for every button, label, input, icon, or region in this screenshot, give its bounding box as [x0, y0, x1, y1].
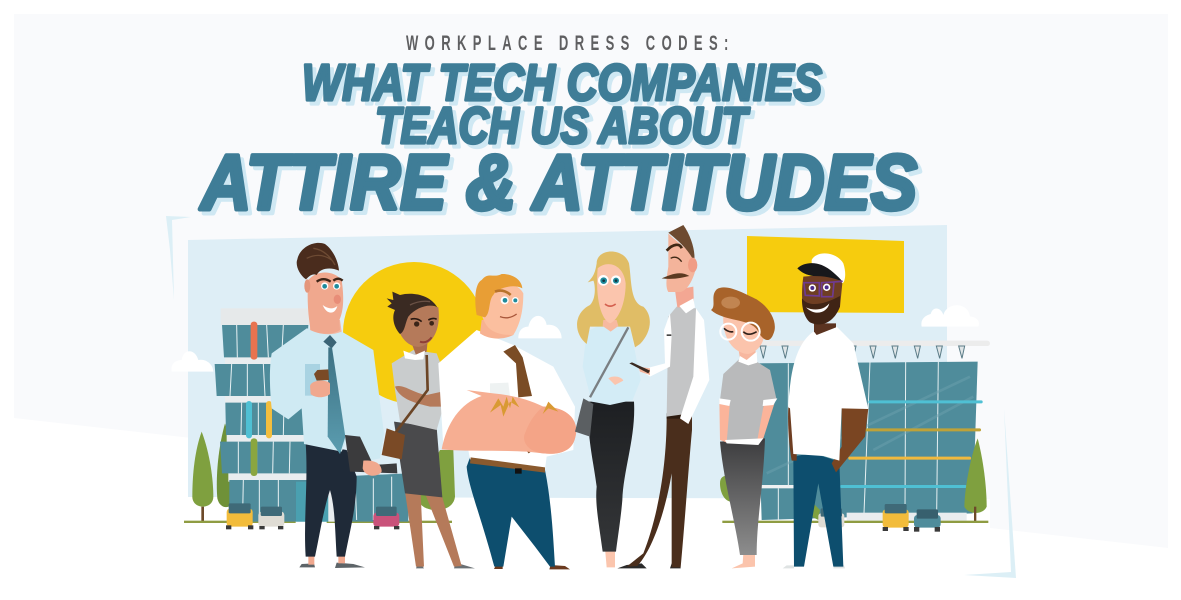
trees right	[720, 438, 987, 521]
roof rail	[760, 341, 990, 346]
subtitle: WORKPLACE DRESS CODES:	[406, 31, 728, 55]
sky panel	[188, 225, 947, 499]
trees	[192, 423, 455, 521]
cloud centre	[518, 316, 562, 338]
left scene	[171, 243, 576, 569]
character: man with cap and beard	[783, 253, 868, 568]
title line 2 shadow: TEACH US ABOUT	[379, 101, 754, 158]
character: tall man with moustache	[617, 225, 709, 568]
roof pennants	[760, 346, 965, 358]
right scene	[575, 225, 990, 568]
cars left	[226, 503, 399, 529]
title line 1 shadow: WHAT TECH COMPANIES	[306, 58, 826, 115]
ground	[188, 497, 990, 560]
character: big man with crossed arms	[438, 274, 576, 569]
title line 2: TEACH US ABOUT	[375, 97, 750, 154]
title line 1: WHAT TECH COMPANIES	[302, 54, 822, 111]
office building right	[757, 362, 983, 521]
ground line centre	[327, 521, 452, 523]
title line 3 shadow: ATTIRE & ATTITUDES	[203, 142, 921, 230]
ground line left	[184, 521, 296, 523]
office building left	[215, 308, 408, 522]
sketch frame bottom right	[964, 408, 1016, 578]
sketch frame top left	[166, 216, 191, 300]
ground line right	[722, 521, 988, 523]
title line 3: ATTIRE & ATTITUDES	[199, 138, 917, 226]
cloud left	[171, 351, 213, 372]
character: woman with round glasses	[711, 287, 777, 568]
heading	[199, 31, 921, 230]
cars right	[818, 504, 941, 532]
yellow sun	[343, 262, 485, 404]
cloud right	[921, 305, 979, 327]
character: blonde woman with shoulder bag	[575, 251, 650, 567]
yellow billboard	[747, 236, 904, 313]
character: woman with satchel	[382, 292, 475, 568]
character: man with tie and coffee	[270, 243, 397, 568]
